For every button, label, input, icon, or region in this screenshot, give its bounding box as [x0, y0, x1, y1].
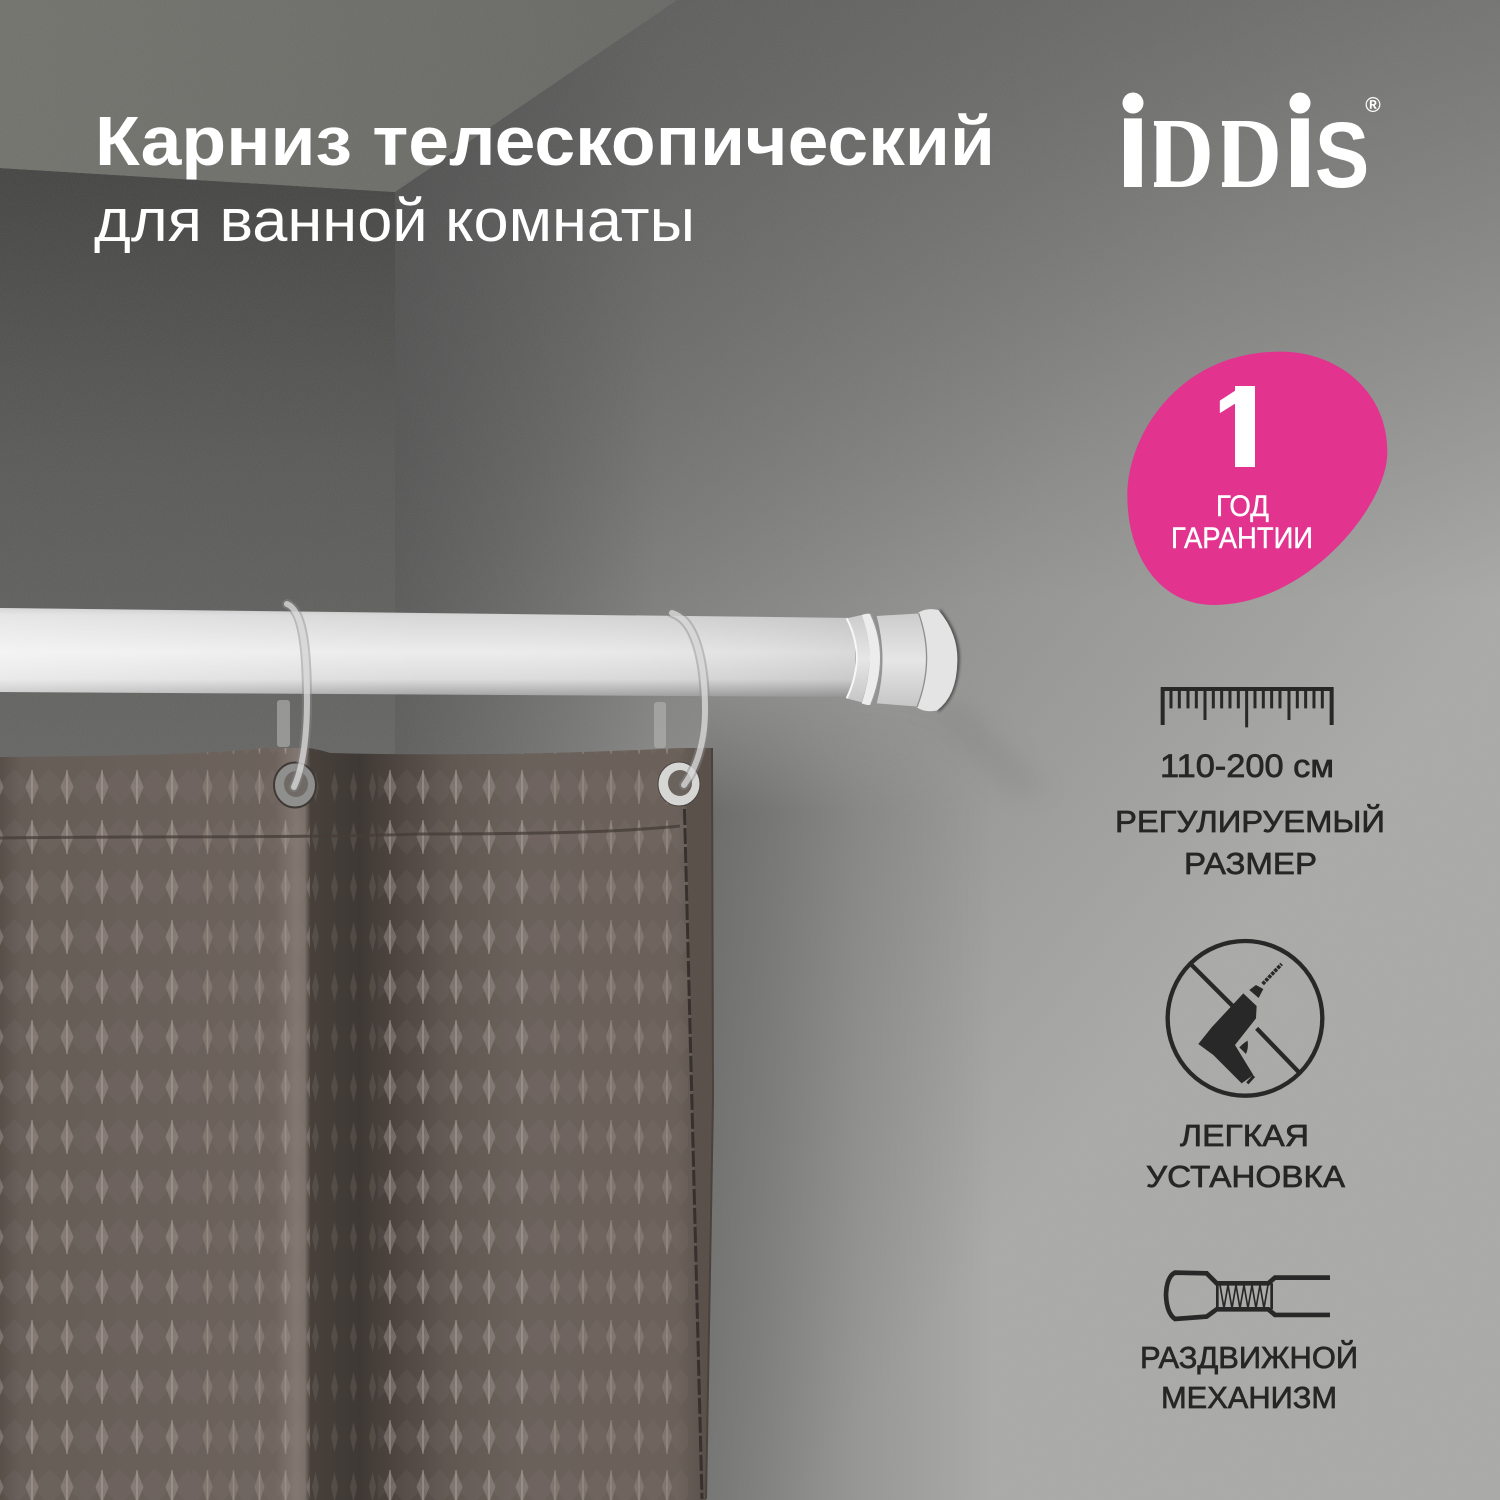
- logo: IDDIS: S: [1315, 103, 1369, 207]
- warranty number: [1220, 386, 1255, 467]
- left curtain ring and eyelet: [274, 604, 316, 808]
- icon: telescopic mechanism: [1166, 1273, 1330, 1319]
- sliding mechanism label: МЕХАНИЗМ: [1161, 1380, 1337, 1415]
- right curtain ring and eyelet: [654, 613, 705, 806]
- curtain shadow on wall: [704, 726, 942, 1500]
- title: Карниз телескопический: [95, 102, 995, 180]
- size range and label: РЕГУЛИРУЕМЫЙ: [1115, 803, 1385, 839]
- logo: IDDIS: i: [1282, 69, 1318, 215]
- size range and label: 110-200 см: [1160, 748, 1334, 784]
- easy installation label: [1146, 1118, 1345, 1194]
- sliding mechanism label: [1140, 1339, 1358, 1415]
- sliding mechanism label: РАЗДВИЖНОЙ: [1140, 1339, 1358, 1375]
- rod shadow on wall: [920, 705, 1050, 795]
- easy installation label: УСТАНОВКА: [1146, 1159, 1345, 1194]
- icon: no drilling: [1168, 941, 1322, 1096]
- easy installation label: ЛЕГКАЯ: [1180, 1118, 1309, 1153]
- logo: IDDIS: [1122, 92, 1380, 188]
- curtain hem stitching: [0, 826, 680, 838]
- subtitle: для ванной комнаты: [94, 187, 695, 254]
- icon: ruler: [1163, 689, 1332, 727]
- logo: IDDIS: i: [1115, 69, 1151, 215]
- logo: IDDIS: ®: [1365, 94, 1381, 117]
- curtain side seam: [684, 790, 702, 1499]
- telescopic rod: [0, 608, 960, 713]
- warranty label: ГОД: [1216, 490, 1269, 523]
- warranty badge: [1127, 352, 1387, 605]
- warranty number: 1: [1212, 364, 1276, 492]
- warranty label: ГАРАНТИИ: [1171, 522, 1313, 555]
- size range and label: [1115, 748, 1385, 881]
- curtain: [0, 748, 720, 1500]
- warranty label: [1171, 490, 1313, 555]
- size range and label: РАЗМЕР: [1184, 846, 1317, 881]
- logo: IDDIS: D: [1147, 97, 1214, 209]
- logo: IDDIS: D: [1215, 97, 1282, 209]
- rod end cap: [847, 608, 960, 713]
